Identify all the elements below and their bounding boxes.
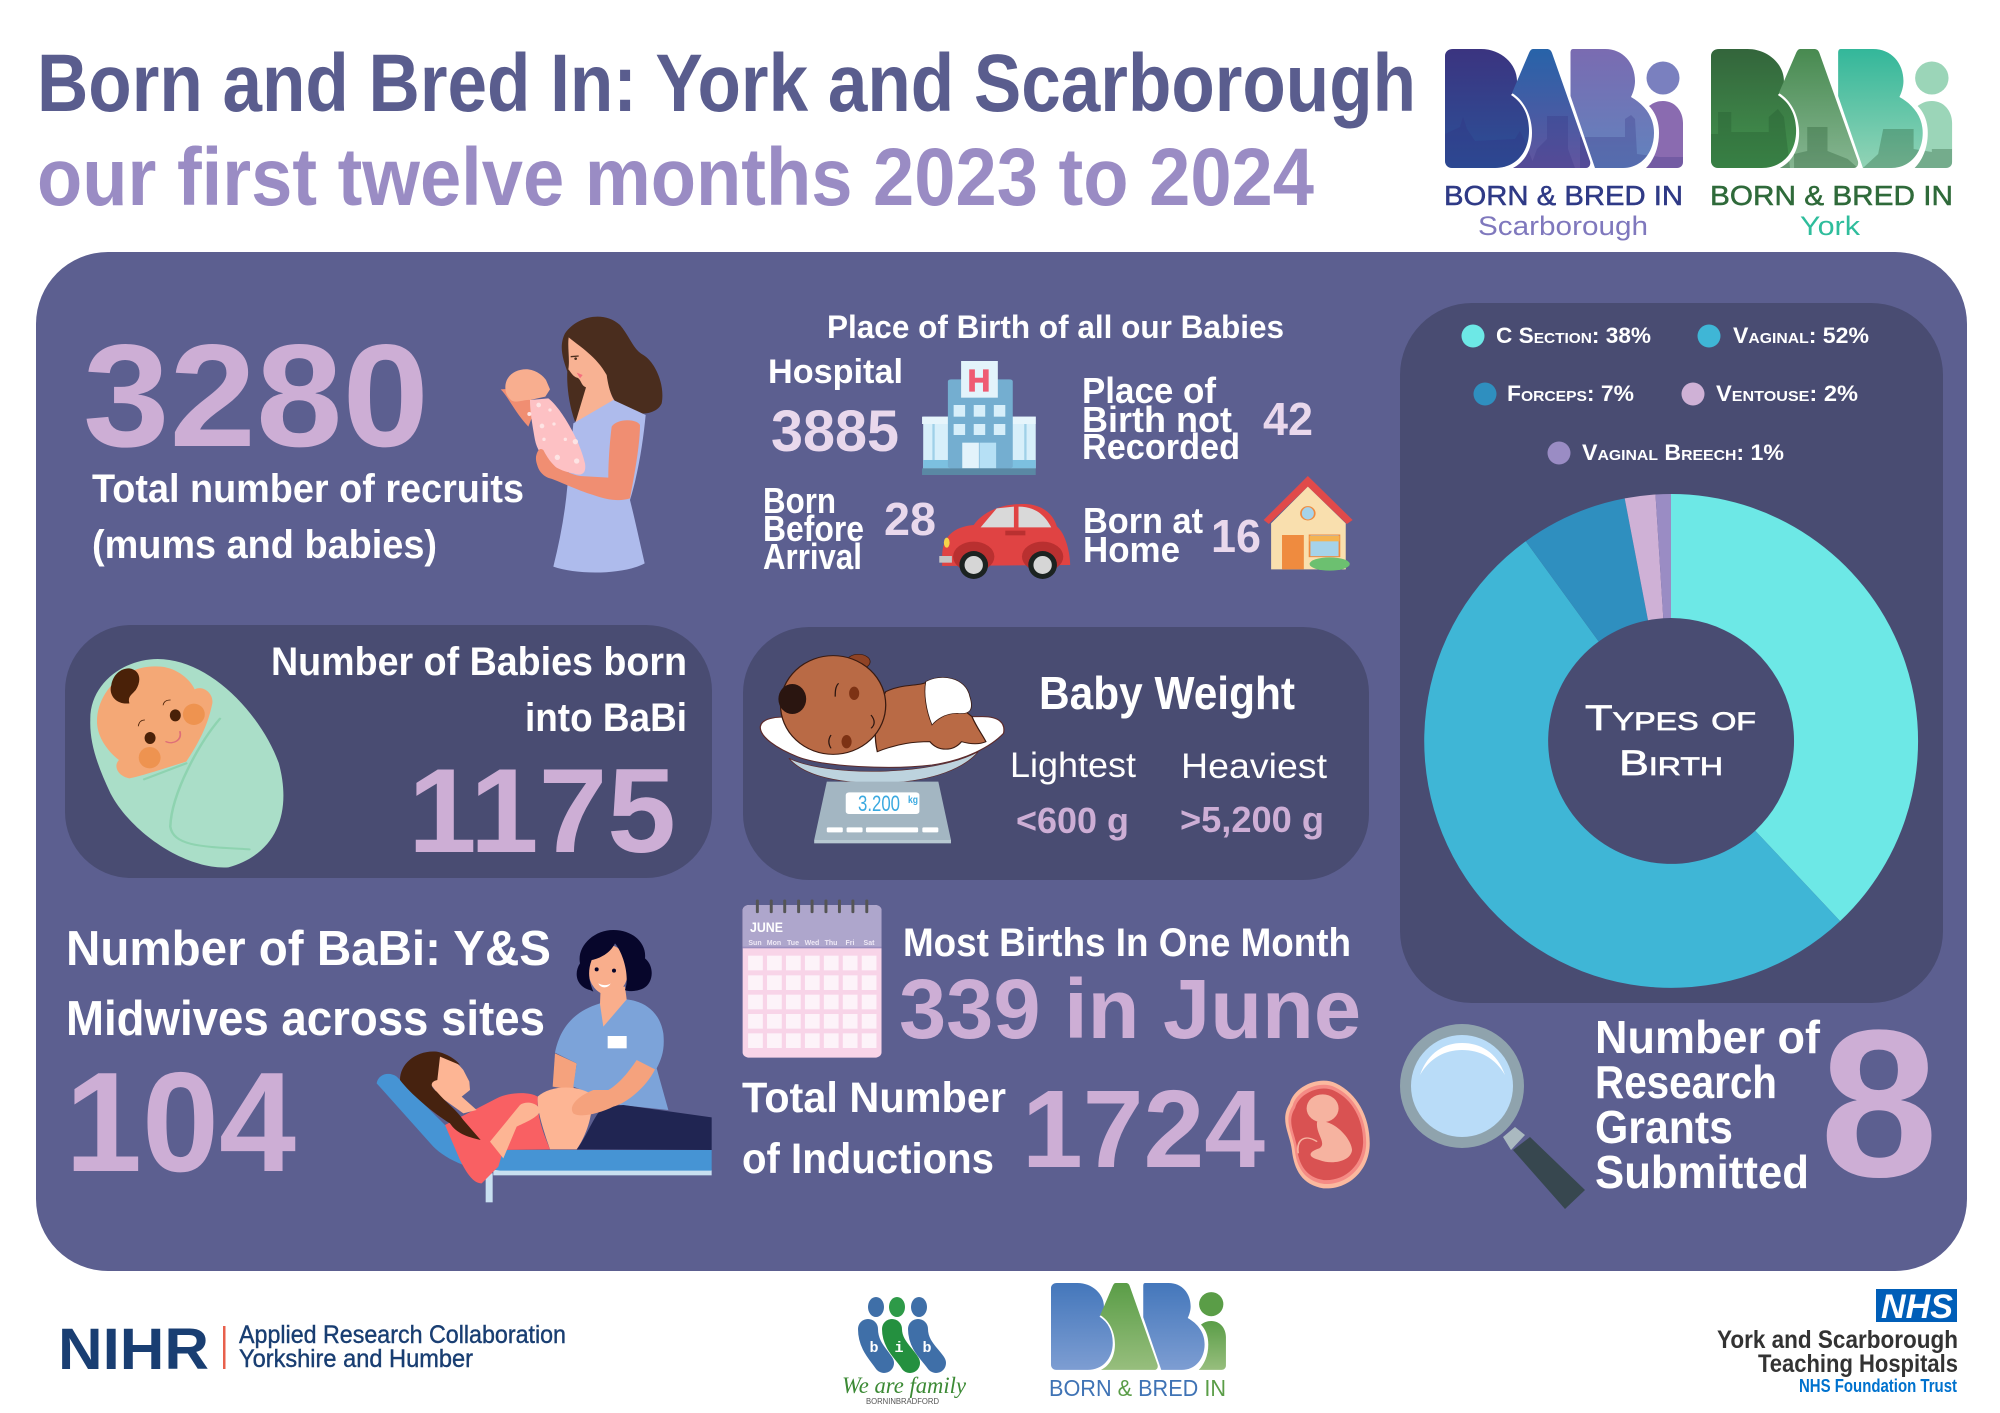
stat: total recruits	[83, 314, 524, 567]
legend: Forceps: 7%	[1507, 381, 1634, 406]
donut chart: types of birth: Types of	[1585, 699, 1756, 738]
icon: calendar: Wed	[805, 940, 819, 947]
logo: NIHR: NIHR	[58, 1317, 209, 1382]
text: baby weight: Baby Weight	[1039, 667, 1295, 719]
logo: NIHR	[58, 1317, 566, 1382]
stat: born at home: Born at	[1083, 500, 1203, 541]
stat: born at home	[1083, 500, 1261, 570]
panel: main background	[36, 252, 1967, 1271]
stat: midwives: Number of BaBi: Y&S	[66, 922, 551, 976]
logo: born in Bradford: BORNINBRADFORD	[866, 1397, 939, 1406]
stat: research grants: 8	[1820, 986, 1938, 1221]
stat: hospital births	[768, 353, 903, 464]
logo: BaBi York: York	[1800, 211, 1861, 241]
stat: born before arrival: Before	[763, 508, 864, 549]
stat: place of birth not recorded: Place of	[1082, 370, 1217, 411]
logo: BaBi Scarborough	[1444, 49, 1685, 241]
icon: calendar: Sat	[864, 940, 875, 947]
logo: NHS York and Scarborough	[1717, 1288, 1958, 1396]
logo: born in Bradford: b	[922, 1340, 932, 1357]
icon: midwife and pregnant woman	[377, 930, 712, 1202]
logo: NIHR: Yorkshire and Humber	[239, 1345, 473, 1373]
logo: BaBi York: BORN & BRED IN	[1710, 180, 1953, 211]
icon: calendar	[743, 901, 882, 1058]
logo: born in Bradford: We are family	[842, 1373, 967, 1398]
icon: calendar: Mon	[767, 940, 781, 947]
logo: BaBi born and bred in	[1049, 1283, 1226, 1401]
donut chart: types of birth	[1424, 494, 1918, 988]
stat: hospital births: Hospital	[768, 353, 903, 391]
icon: calendar: JUNE	[750, 919, 783, 935]
stat: born before arrival: Arrival	[763, 536, 862, 577]
stat: midwives: 104	[65, 1043, 296, 1202]
stat: midwives: Midwives across sites	[66, 992, 545, 1046]
stat: place of birth not recorded: Recorded	[1082, 426, 1240, 467]
logo: NHS York and Scarborough: NHS Foundation Trust	[1799, 1376, 1957, 1396]
text: number of babies: 1175	[408, 744, 676, 878]
icon: fetus in womb	[1285, 1081, 1370, 1188]
panel: types of birth	[1400, 303, 1943, 1003]
stat: place of birth not recorded	[1082, 370, 1313, 467]
icon: calendar: Thu	[825, 940, 837, 947]
logo: born in Bradford	[842, 1297, 967, 1406]
title: our first twelve months 2023 to 2024	[37, 132, 1314, 223]
icon: calendar: Tue	[787, 940, 799, 947]
legend: Vaginal: 52%	[1733, 323, 1869, 348]
text: number of babies	[271, 640, 687, 878]
icon: baby on scales: kg	[908, 795, 918, 806]
logo: born in Bradford: i	[894, 1340, 904, 1357]
stat: research grants: Submitted	[1595, 1146, 1809, 1198]
stat: place of birth not recorded: 42	[1263, 393, 1313, 445]
stat: research grants: Grants	[1595, 1101, 1733, 1153]
stat: born before arrival	[763, 480, 936, 577]
stat: research grants: Research	[1595, 1056, 1777, 1108]
donut chart: types of birth: Birth	[1619, 744, 1723, 783]
text: baby weight: >5,200 g	[1180, 799, 1324, 840]
logo: born in Bradford: b	[869, 1340, 879, 1357]
icon: calendar: Fri	[846, 940, 855, 947]
stat: total number of inductions: Total Number	[742, 1074, 1006, 1122]
logo: BaBi born and bred in: BORN & BRED IN	[1049, 1375, 1226, 1401]
icon: baby on scales	[760, 654, 1004, 843]
panel: baby weight	[743, 627, 1369, 880]
stat: total number of inductions: of Inductions	[742, 1135, 994, 1183]
stat: place of birth not recorded: Birth not	[1082, 399, 1232, 440]
legend: C Section: 38%	[1496, 323, 1651, 348]
logo: BaBi Scarborough: Scarborough	[1478, 211, 1648, 241]
stat: research grants	[1595, 986, 1938, 1221]
title: Born and Bred In: York and Scarborough	[37, 38, 1416, 129]
stat: research grants: Number of	[1595, 1011, 1821, 1063]
icon: hospital: H	[968, 363, 990, 398]
icon: car	[939, 504, 1070, 579]
section: place of birth	[763, 309, 1353, 579]
text: number of babies: into BaBi	[525, 696, 687, 740]
stat: total number of inductions	[742, 1068, 1265, 1191]
stat: midwives	[65, 922, 551, 1202]
heading: place of birth: Place of Birth of all our Babies	[827, 309, 1284, 345]
logo: NHS York and Scarborough: Teaching Hospitals	[1758, 1350, 1958, 1378]
logo: NIHR: Applied Research Collaboration	[239, 1321, 566, 1349]
title	[37, 38, 1416, 223]
stat: total recruits: 3280	[83, 314, 429, 477]
icon: calendar: Sun	[748, 940, 762, 947]
icon: mother holding baby	[501, 317, 662, 573]
text: baby weight: Lightest	[1010, 746, 1136, 785]
panel: babies born into BaBi	[65, 625, 712, 878]
logo: BaBi York	[1710, 49, 1954, 241]
icon: baby on scales: 3.200	[858, 791, 900, 816]
logo: BaBi Scarborough: BORN & BRED IN	[1444, 180, 1683, 211]
legend: Vaginal Breech: 1%	[1582, 440, 1784, 465]
stat: born before arrival: 28	[884, 493, 936, 545]
legend	[1462, 323, 1869, 465]
stat: hospital births: 3885	[771, 399, 899, 464]
stat: total number of inductions: 1724	[1022, 1068, 1265, 1191]
logo: NHS York and Scarborough: NHS	[1881, 1288, 1953, 1326]
stat: born at home: Home	[1083, 529, 1180, 570]
text: baby weight	[1010, 667, 1327, 841]
stat: most births in one month	[899, 921, 1361, 1056]
stat: total recruits: Total number of recruits	[92, 467, 524, 511]
icon: house	[1264, 476, 1353, 571]
legend: Ventouse: 2%	[1716, 381, 1858, 406]
icon: magnifying glass	[1400, 1024, 1585, 1209]
text: number of babies: Number of Babies born	[271, 640, 687, 684]
stat: most births in one month: Most Births In One Month	[903, 921, 1351, 965]
text: baby weight: <600 g	[1016, 800, 1129, 841]
text: baby weight: Heaviest	[1181, 747, 1327, 786]
icon: swaddled baby	[90, 659, 283, 867]
stat: total recruits: (mums and babies)	[92, 523, 437, 567]
stat: born before arrival: Born	[763, 480, 836, 521]
stat: most births in one month: 339 in June	[899, 962, 1361, 1056]
logo: NHS York and Scarborough: York and Scarborough	[1717, 1326, 1958, 1354]
stat: born at home: 16	[1211, 510, 1261, 562]
icon: hospital	[922, 361, 1036, 475]
